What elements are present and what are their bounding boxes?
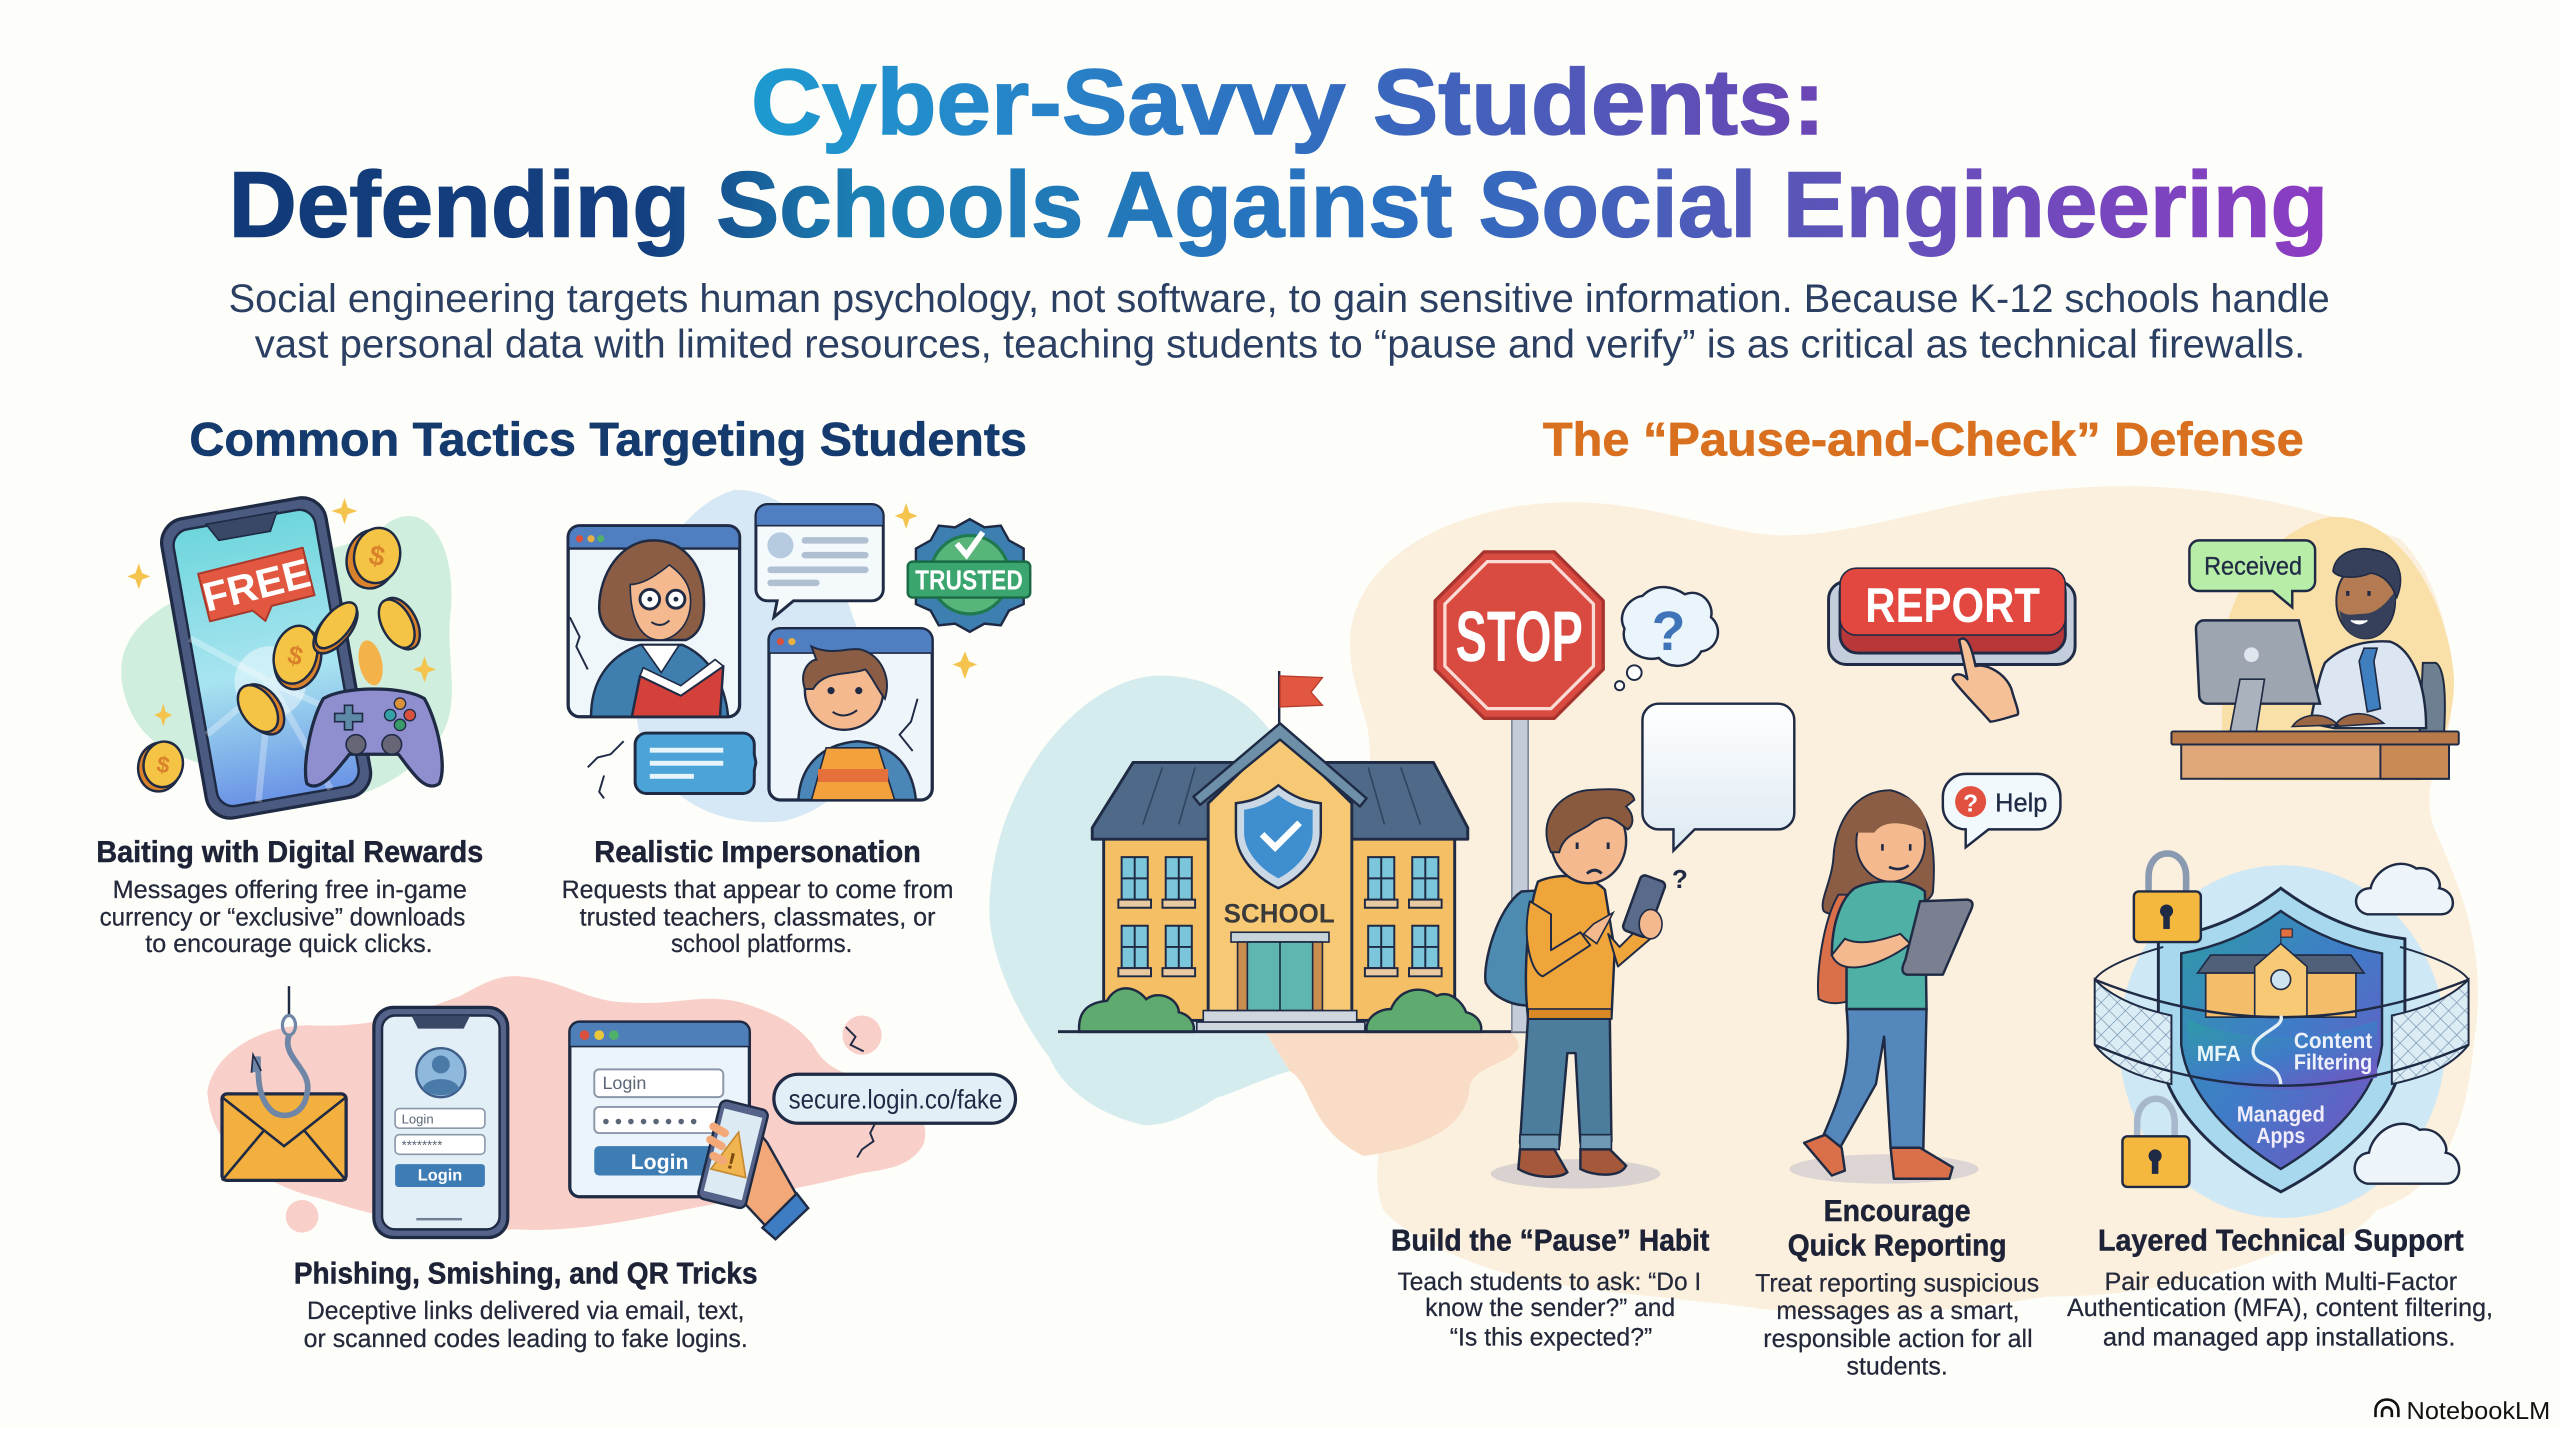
mesh ring xyxy=(2095,947,2469,1086)
green background blob xyxy=(121,516,452,800)
puzzle connector xyxy=(2253,1016,2281,1084)
jeans xyxy=(1824,1009,1927,1151)
text: realistic impersonation: school platforms. xyxy=(671,931,852,958)
octagon xyxy=(1435,552,1603,718)
salmon blob xyxy=(1265,1032,1519,1156)
desk xyxy=(2171,731,2459,779)
jeans cuffs xyxy=(1520,1135,1611,1149)
title: Cyber-Savvy Students: xyxy=(751,51,1825,155)
hoodie arm front xyxy=(1527,901,1590,976)
text: encourage quick reporting: responsible action for all xyxy=(1763,1326,2033,1353)
shadow xyxy=(1789,1154,1979,1184)
roof lines xyxy=(1143,767,1420,824)
text: phishing: or scanned codes leading to fake logins. xyxy=(304,1326,748,1353)
hand xyxy=(1639,909,1662,939)
hoodie rib xyxy=(1528,1009,1611,1019)
icon: coin xyxy=(266,621,328,695)
content filtering label: Filtering xyxy=(2294,1050,2372,1074)
heading: common tactics: Common Tactics Targeting Students xyxy=(189,415,1027,467)
chair xyxy=(2420,663,2445,731)
managed apps label xyxy=(2237,1102,2325,1148)
text: layered technical support: Layered Technical Support xyxy=(2098,1223,2464,1257)
intro text: vast personal data with limited resources, teaching students to “pause and verify” is as critical as technical firewalls. xyxy=(255,323,2305,367)
icon: browser login: Login xyxy=(602,1074,646,1094)
hoodie arm rear xyxy=(1608,924,1652,967)
panel: baiting illustration xyxy=(121,494,452,822)
text: realistic impersonation: trusted teachers, classmates, or xyxy=(580,904,936,932)
heading: pause and check defense: The “Pause-and-Check” Defense xyxy=(1543,415,2304,467)
window: student xyxy=(769,629,932,800)
shoes xyxy=(1804,1135,1953,1179)
icon: envelope with hook xyxy=(222,986,346,1180)
mouth xyxy=(2351,620,2367,624)
phone xyxy=(1622,874,1666,938)
puzzled marks: ? xyxy=(1672,867,1688,895)
icon: cloud bottom xyxy=(2355,1124,2459,1184)
icon: coin xyxy=(305,596,367,661)
icon: coin: $ xyxy=(366,539,389,573)
school roof xyxy=(1092,762,1468,839)
icon: faded coin xyxy=(355,638,387,688)
teal blob xyxy=(989,676,1371,1125)
text: realistic impersonation xyxy=(562,834,953,958)
hair back xyxy=(1823,790,1934,916)
help bubble xyxy=(1943,774,2060,847)
small school xyxy=(2198,929,2364,1017)
text: encourage quick reporting: students. xyxy=(1847,1353,1948,1381)
glitch cracks xyxy=(570,617,918,798)
backpack xyxy=(1818,895,1874,1003)
managed apps label: Managed xyxy=(2237,1102,2325,1127)
text: realistic impersonation: Realistic Impersonation xyxy=(594,834,921,869)
hair xyxy=(2333,549,2401,598)
school label: SCHOOL xyxy=(1224,900,1335,929)
sparkles xyxy=(895,503,977,679)
sparkles xyxy=(127,498,436,727)
url pill: secure.login.co/fake xyxy=(789,1086,1002,1115)
pointing hand xyxy=(1953,639,2018,722)
icon: trusted badge: TRUSTED xyxy=(915,565,1023,596)
text: layered technical support: Authentication (MFA), content filtering, xyxy=(2067,1295,2493,1322)
help bubble: Help xyxy=(1995,790,2048,818)
text: phishing: Deceptive links delivered via email, text, xyxy=(307,1298,744,1326)
text: build the pause habit: know the sender?” and xyxy=(1425,1295,1675,1322)
shirt xyxy=(1832,881,1927,1009)
eyes xyxy=(2348,591,2369,596)
hair xyxy=(1546,789,1634,852)
sign pole xyxy=(1512,715,1528,1032)
received bubble: Received xyxy=(2204,553,2302,581)
backpack xyxy=(1485,890,1551,1005)
icon: free banner: FREE xyxy=(198,551,315,621)
jeans xyxy=(1520,1016,1611,1146)
pointing hand xyxy=(1584,913,1613,944)
hoodie xyxy=(1526,876,1615,1019)
door xyxy=(1231,932,1329,1011)
report button: REPORT xyxy=(1865,580,2040,633)
hands xyxy=(2292,714,2384,727)
icon: stop sign xyxy=(1435,552,1603,1032)
text: encourage quick reporting: Encourage xyxy=(1824,1193,1971,1228)
head xyxy=(2336,563,2395,638)
icon: hand holding phone with warning xyxy=(697,1099,808,1239)
shield with check xyxy=(1236,785,1321,888)
managed apps label: Apps xyxy=(2256,1123,2305,1148)
icon: game controller xyxy=(306,689,442,786)
head xyxy=(1856,803,1925,882)
text: layered technical support xyxy=(2067,1223,2493,1352)
yellow blob xyxy=(2222,517,2454,780)
face xyxy=(1882,844,1910,869)
icon: coin: $ xyxy=(284,642,306,672)
shield inner xyxy=(2181,911,2382,1169)
text: baiting with digital rewards: currency or “exclusive” downloads xyxy=(100,904,466,932)
tie xyxy=(2359,648,2380,712)
icon: thought cloud with question mark xyxy=(1615,587,1718,690)
icon: coin xyxy=(371,591,428,657)
blue background blob xyxy=(630,490,873,822)
icon: coin xyxy=(230,675,293,743)
school central tower xyxy=(1208,733,1352,1020)
report button xyxy=(1829,568,2075,722)
text: phishing xyxy=(294,1256,758,1353)
intro text: Social engineering targets human psychology, not software, to gain sensitive information. Because K-12 schools handle xyxy=(229,278,2330,322)
icon: trusted badge xyxy=(908,519,1030,632)
layered security shield xyxy=(2095,853,2469,1218)
text: layered technical support: and managed app installations. xyxy=(2103,1324,2456,1352)
icon: phone login xyxy=(374,1007,508,1238)
shield outer xyxy=(2158,888,2405,1192)
icon: phone login: Login xyxy=(418,1167,462,1185)
text: encourage quick reporting: messages as a smart, xyxy=(1776,1298,2020,1326)
shoes xyxy=(1518,1149,1626,1177)
background: defense blobs xyxy=(989,486,2478,1314)
text: encourage quick reporting: Quick Reporting xyxy=(1788,1228,2007,1262)
icon: thought cloud with question mark: ? xyxy=(1652,601,1686,663)
icon: padlock bottom xyxy=(2122,1099,2189,1187)
help bubble: ? xyxy=(1963,790,1978,818)
notebooklm watermark: NotebookLM xyxy=(2407,1398,2550,1425)
text: build the pause habit: Teach students to ask: “Do I xyxy=(1398,1269,1701,1296)
mfa label: MFA xyxy=(2197,1042,2241,1066)
text: baiting with digital rewards: Messages offering free in-game xyxy=(113,877,467,904)
tablet xyxy=(1902,900,1972,975)
face xyxy=(1577,842,1608,873)
text: encourage quick reporting: Treat reporting suspicious xyxy=(1755,1270,2040,1298)
icon: padlock top xyxy=(2134,853,2201,942)
icon: coin: $ xyxy=(155,750,172,778)
panel: phishing illustration xyxy=(207,976,1016,1239)
text: baiting with digital rewards: to encourage quick clicks. xyxy=(145,931,433,958)
icon: tilted phone xyxy=(158,494,374,822)
icon: stop sign: STOP xyxy=(1456,598,1583,678)
text: build the pause habit: “Is this expected?” xyxy=(1450,1324,1652,1352)
icon: phone login: Login xyxy=(402,1112,434,1127)
window: teacher xyxy=(568,526,740,717)
pink background blob xyxy=(207,976,925,1230)
windows xyxy=(1118,857,1442,976)
flag xyxy=(1278,671,1280,723)
icon: coin xyxy=(134,738,187,795)
panel: impersonation illustration xyxy=(568,490,1030,822)
arm xyxy=(1832,934,1910,967)
torso xyxy=(2310,641,2426,728)
blue circle xyxy=(2119,865,2446,1218)
text: build the pause habit: Build the “Pause” Habit xyxy=(1391,1223,1709,1257)
icon: cloud top xyxy=(2356,864,2453,914)
empty speech bubble xyxy=(1642,704,1794,851)
text: layered technical support: Pair education with Multi-Factor xyxy=(2104,1269,2457,1296)
lower shield band xyxy=(2188,1020,2377,1090)
shadow xyxy=(1491,1159,1660,1189)
school gable xyxy=(1193,723,1367,807)
window: chat message xyxy=(756,504,883,617)
bushes xyxy=(1079,988,1481,1032)
steps xyxy=(1197,1011,1365,1032)
title: Defending Schools Against Social Engineering xyxy=(229,153,2328,258)
title xyxy=(229,51,2328,258)
icon: hand holding phone with warning: ! xyxy=(725,1147,738,1174)
text: encourage quick reporting xyxy=(1755,1193,2040,1381)
icon: browser login: Login xyxy=(631,1149,689,1174)
beard xyxy=(2340,591,2395,638)
text: phishing: Phishing, Smishing, and QR Tricks xyxy=(294,1256,758,1290)
content filtering label xyxy=(2294,1029,2373,1074)
text: baiting with digital rewards xyxy=(96,834,483,958)
icon: school building xyxy=(1058,671,1530,1033)
head xyxy=(1551,798,1626,883)
it support staff at desk xyxy=(2171,540,2459,779)
icon: browser login xyxy=(570,1022,749,1197)
student with tablet xyxy=(1789,774,2060,1184)
ground line xyxy=(1058,1030,1530,1033)
student with phone xyxy=(1485,789,1688,1189)
text: baiting with digital rewards: Baiting with Digital Rewards xyxy=(96,834,483,869)
url pill xyxy=(774,1027,1016,1158)
icon: coin xyxy=(341,522,405,594)
school wings xyxy=(1104,836,1455,1020)
received bubble xyxy=(2189,540,2315,607)
text: build the pause habit xyxy=(1391,1223,1709,1352)
fringe xyxy=(1855,795,1927,833)
intro text xyxy=(229,278,2330,367)
icon: browser login: •••••••• xyxy=(602,1110,697,1133)
text: realistic impersonation: Requests that appear to come from xyxy=(562,877,953,904)
peach blob xyxy=(1339,486,2478,1314)
icon: phone login: ******** xyxy=(402,1138,442,1153)
speech bubble: blue message xyxy=(635,733,756,793)
content filtering label: Content xyxy=(2294,1029,2373,1053)
monitor xyxy=(2196,620,2320,731)
